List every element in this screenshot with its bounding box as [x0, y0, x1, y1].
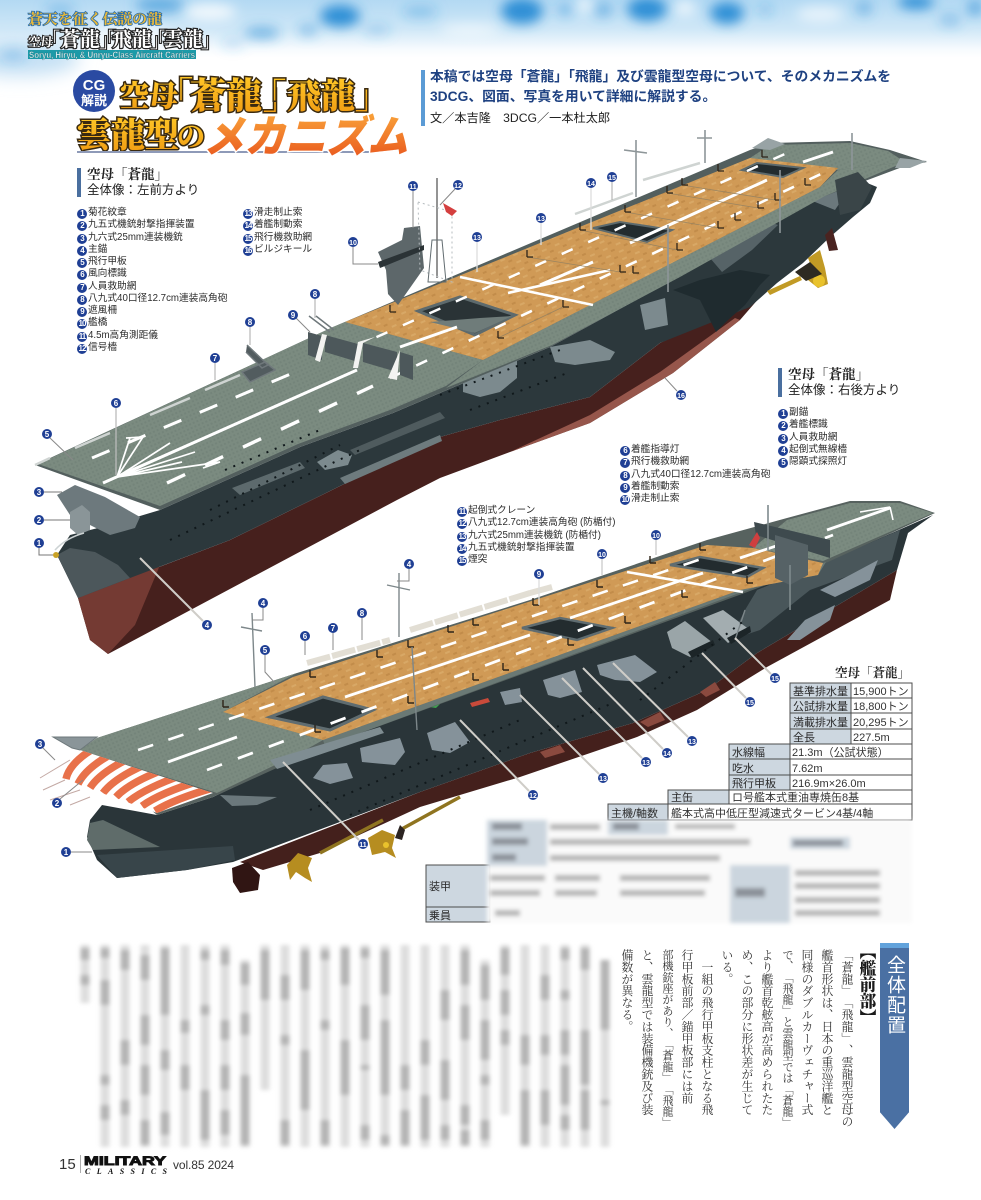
callout 8 (ship 2): 8	[360, 609, 365, 618]
callout 9 (ship 1)	[288, 310, 310, 332]
legend: ship 1 column 2: 滑走制止索	[254, 207, 302, 218]
main title: 雲龍型	[77, 116, 179, 155]
ship 1 stern hull	[835, 172, 872, 215]
legend: ship 2 items 11-15: 14	[459, 544, 465, 553]
callout 13 (ship 1): 13	[473, 235, 481, 242]
callout 11 (ship 1): 11	[409, 184, 417, 191]
callout 2 (ship 1): 2	[37, 516, 42, 525]
legend: ship 2 items 1-5: 4	[781, 446, 785, 455]
legend: ship 1 column 2: 飛行機救助網	[254, 232, 312, 242]
series logo	[28, 11, 221, 60]
specification table	[426, 665, 912, 923]
legend: ship 2 items 6-10: 9	[623, 483, 627, 492]
legend: ship 1 column 1: 九六式25mm連装機銃	[88, 232, 183, 242]
series logo: 」	[150, 30, 170, 52]
legend: ship 1 column 2: 14	[245, 221, 251, 230]
series logo: Soryu, Hiryu, & Unryu-Class Aircraft Carriers	[29, 50, 195, 60]
callout 2 (ship 2): 2	[55, 799, 60, 808]
ship 2 stripes on stern round-down	[62, 750, 213, 813]
main title: 空母	[120, 80, 178, 113]
ship 2 funnels	[667, 610, 751, 658]
CG解説 badge	[73, 70, 115, 112]
callout 3 (ship 1)	[34, 487, 62, 497]
callout 8 (ship 2)	[357, 608, 367, 640]
ship 1 wind screens	[308, 332, 413, 380]
panel heading: left front view	[77, 168, 199, 197]
legend: ship 2 items 6-10: 6	[623, 446, 627, 455]
legend: ship 1 column 1: 1	[80, 209, 84, 218]
legend: ship 1 column 1: 6	[80, 270, 84, 279]
legend: ship 2 items 1-5: 副錨	[789, 407, 808, 418]
callout 12 (ship 1): 12	[454, 183, 462, 190]
callout 15 (ship 2)	[702, 653, 755, 707]
panel heading: right rear view: 全体像：右後方より	[788, 382, 900, 396]
main title	[77, 76, 418, 162]
legend: ship 1 column 1: 8	[80, 295, 84, 304]
callout 4 (ship 1): 4	[205, 621, 210, 630]
legend: ship 1 column 1: 4	[80, 246, 84, 255]
ship 2 stern netting	[40, 760, 90, 805]
callout 4 (ship 1)	[140, 558, 212, 630]
footer logo: MILITARY	[84, 1154, 166, 1168]
callout 6 (ship 1): 6	[114, 399, 119, 408]
ship 2 elevators	[270, 697, 373, 730]
table values: 15,900トン	[853, 686, 909, 698]
table values: 20,295トン	[853, 717, 909, 729]
legend: ship 2 items 11-15: 15	[459, 556, 465, 565]
callout 10 second (ship 2)	[651, 530, 661, 555]
table title: 空母「蒼龍」	[835, 665, 910, 680]
issue info: vol.85 2024	[173, 1158, 234, 1172]
ship 2 red lower hull	[240, 570, 897, 870]
legend: ship 1 column 2: ビルジキール	[254, 244, 312, 255]
CG解説 badge: CG	[83, 77, 105, 94]
callout 10 second (ship 2): 10	[652, 533, 660, 540]
series logo: 空母	[28, 34, 53, 49]
callout 3 (ship 1): 3	[37, 488, 42, 497]
series logo: 」	[99, 30, 119, 52]
callout 1 (ship 2): 1	[64, 848, 69, 857]
ship 2 stern green deck	[80, 673, 323, 793]
panel heading: right rear view: 空母「蒼龍」	[788, 367, 869, 382]
callout 8 (ship 1): 8	[248, 318, 253, 327]
armour and crew rows	[426, 865, 490, 922]
legend: ship 1 column 1: 遮風柵	[88, 305, 117, 316]
callout 14 (ship 2)	[583, 668, 672, 758]
callout 11 (ship 2)	[283, 762, 368, 849]
legend: ship 2 items 6-10	[620, 444, 770, 505]
series logo: 蒼天を征く伝説の龍	[28, 11, 162, 28]
callout 14 (ship 1)	[586, 178, 596, 230]
ship 1 bow grey	[57, 548, 130, 598]
ship 2 red patches	[540, 682, 720, 758]
ship 2 sponsons	[313, 560, 878, 784]
legend: ship 1 column 1	[77, 206, 228, 354]
callout 5 (ship 2)	[260, 645, 275, 683]
ship 1 forecastle rail	[55, 533, 84, 550]
series logo: 」	[201, 30, 221, 52]
legend: ship 2 items 1-5	[778, 406, 847, 468]
ship 1 propellers and shaft	[767, 250, 828, 295]
panel heading: right rear view	[778, 368, 900, 397]
section banner: 全体配置	[884, 955, 905, 1035]
intro accent bar	[421, 70, 425, 126]
callout 13 second (ship 2): 13	[642, 760, 650, 767]
legend: ship 1 column 2: 13	[245, 209, 251, 218]
callout 10 (ship 2)	[597, 549, 607, 575]
legend: ship 1 column 1: 主錨	[88, 244, 107, 255]
table values	[671, 686, 909, 820]
series logo: 飛龍	[112, 28, 152, 51]
legend: ship 2 items 1-5: 人員救助網	[789, 432, 837, 442]
callout 8 second (ship 1)	[310, 289, 320, 318]
legend: ship 2 items 11-15: 煙突	[468, 554, 487, 565]
legend: ship 1 column 1: 3	[80, 234, 84, 242]
callout 13 third (ship 2)	[613, 663, 697, 746]
ship 2 lower stern highlight	[97, 846, 235, 878]
main title: メカニズム	[201, 113, 418, 162]
ship 2 boat deck green equipment	[408, 700, 440, 708]
series logo: 「	[41, 29, 61, 52]
legend: ship 1 column 1: 信号檣	[88, 342, 117, 353]
table labels: 水線幅	[732, 746, 765, 759]
legend: ship 2 items 11-15: 九五式機銃射撃指揮装置	[468, 542, 575, 553]
series logo: 「	[96, 29, 116, 52]
ship 2 deck side strip	[323, 562, 826, 746]
ship 1 masts	[624, 130, 852, 292]
legend: ship 1 column 1: 八九式40口径12.7cm連装高角砲	[88, 293, 227, 304]
callout 1 (ship 2)	[61, 847, 92, 857]
legend: ship 1 column 1: 風向標識	[88, 268, 127, 279]
ship 1 portholes	[170, 350, 570, 540]
ship 2 rudder	[232, 862, 260, 893]
ship 1 elevators	[418, 297, 515, 335]
series logo: 雲龍	[163, 27, 203, 51]
callout 4 mast forward (ship 2): 4	[407, 560, 412, 569]
table labels: 満載排水量	[793, 715, 848, 729]
series logo: 蒼龍	[60, 28, 100, 51]
ship 2 propellers	[287, 825, 405, 882]
blurred table section	[487, 820, 912, 923]
callout 3 (ship 2): 3	[38, 740, 43, 749]
table labels: 公試排水量	[793, 699, 848, 713]
footer logo	[80, 1154, 168, 1176]
table values: 7.62m	[792, 763, 823, 775]
ship 1 deck edge	[35, 141, 927, 510]
ship 2 port nets	[307, 587, 552, 663]
legend: ship 1 column 2: 着艦制動索	[254, 219, 302, 230]
callout 9 (ship 1): 9	[291, 311, 296, 320]
ship 1 chrysanthemum crest	[53, 552, 59, 558]
legend: ship 1 column 2	[243, 206, 312, 256]
legend: ship 2 items 11-15: 12	[459, 519, 465, 528]
callout 9 (ship 2): 9	[537, 570, 542, 579]
callout 11 (ship 2): 11	[359, 842, 367, 849]
callout 10 (ship 2): 10	[598, 552, 606, 559]
callout 13 (ship 2)	[520, 695, 608, 783]
callout 15 second (ship 2): 15	[771, 676, 779, 683]
legend: ship 2 items 6-10: 着艦制動索	[631, 481, 679, 492]
legend: ship 2 items 11-15: 九六式25mm連装機銃 (防楯付)	[468, 530, 601, 540]
legend: ship 1 column 2: 15	[245, 234, 251, 242]
intro text: 文／本吉隆 3DCG／一本杜太郎	[430, 111, 610, 125]
callout 1 (ship 1): 1	[37, 539, 42, 548]
legend: ship 1 column 1: 4.5m高角測距儀	[88, 330, 158, 340]
ship 2 red equipment	[470, 698, 490, 707]
table rows	[608, 683, 912, 820]
ship 1 dark hull fins	[673, 270, 770, 332]
legend: ship 1 column 1: 7	[80, 282, 84, 292]
legend: ship 1 column 1: 2	[80, 221, 84, 230]
ship 2 portholes	[310, 620, 745, 815]
callout 4 mast aft (ship 2)	[252, 598, 268, 620]
callout 12 (ship 1)	[440, 180, 463, 205]
table labels: 飛行甲板	[732, 776, 776, 790]
main title: 」	[263, 76, 299, 116]
callout 10 (ship 1): 10	[349, 240, 357, 247]
callout 5 (ship 2): 5	[263, 646, 268, 655]
section subheading: 【艦前部】	[857, 943, 876, 1026]
callout 6 (ship 2): 6	[303, 632, 308, 641]
ship 1 arresting posts	[390, 150, 811, 338]
ship 1 rudder	[825, 228, 838, 251]
table values: 227.5m	[853, 732, 890, 744]
ship 2 shafts	[320, 797, 460, 853]
callout 7 (ship 1)	[210, 353, 220, 380]
main title: 「	[252, 78, 286, 116]
callout 5 (ship 1): 5	[45, 430, 50, 439]
intro text: 本稿では空母「蒼龍」「飛龍」及び雲龍型空母について、そのメカニズムを	[430, 69, 891, 84]
section banner	[880, 943, 909, 1129]
table values: ロ号艦本式重油専焼缶8基	[732, 790, 859, 804]
table labels: 主機/軸数	[611, 806, 658, 820]
legend: ship 2 items 11-15: 11	[459, 507, 465, 516]
legend: ship 2 items 6-10: 滑走制止索	[631, 493, 679, 504]
ship 2 island	[749, 505, 830, 610]
ship 1 deck markings	[92, 152, 833, 483]
armour and crew rows: 乗員	[429, 909, 451, 922]
callout 15 (ship 1): 15	[608, 175, 616, 182]
legend: ship 2 items 11-15	[457, 504, 615, 566]
legend: ship 1 column 1: 9	[80, 307, 84, 316]
callout 7 (ship 1): 7	[213, 354, 218, 363]
ship 1 bow red planks	[78, 565, 160, 654]
series logo: 「	[147, 29, 167, 52]
callout 6 (ship 2)	[300, 631, 310, 655]
ship 1 lower hull (red)	[78, 297, 760, 654]
legend: ship 1 column 1: 11	[79, 332, 85, 340]
legend: ship 2 items 1-5: 隠顕式探照灯	[789, 456, 847, 467]
callout 14 (ship 2): 14	[663, 751, 671, 758]
table labels: 吃水	[732, 762, 754, 775]
CG解説 badge: 解説	[81, 93, 107, 108]
legend: ship 2 items 6-10: 飛行機救助網	[631, 456, 689, 467]
legend: ship 2 items 6-10: 7	[623, 458, 627, 467]
callout 14 (ship 1): 14	[587, 181, 595, 188]
legend: ship 2 items 11-15: 八九式12.7cm連装高角砲 (防楯付)	[468, 517, 615, 528]
ship 1 arresting wires	[498, 185, 775, 338]
ship 1 dark hull	[57, 172, 877, 598]
callout 11 (ship 1)	[408, 181, 418, 228]
ship 1 stern lattice	[752, 138, 927, 168]
main title: 」	[355, 79, 389, 116]
callout 16 (ship 1): 16	[677, 393, 685, 400]
callout 7 (ship 2): 7	[331, 624, 336, 633]
ship 1 bow gun platform	[57, 485, 140, 535]
armour and crew rows: 装甲	[429, 880, 451, 893]
ship 2 stern support	[220, 795, 277, 806]
callout 2 (ship 2)	[52, 780, 83, 808]
ship 1 green deck forward	[38, 322, 483, 506]
legend: ship 2 items 6-10: 八九式40口径12.7cm連装高角砲	[631, 468, 770, 480]
callout 4 mast forward (ship 2)	[397, 559, 414, 581]
ship 2 dark hull	[87, 515, 933, 878]
panel heading: left front view: 全体像：左前方より	[87, 182, 199, 196]
ship 2 forward green deck	[753, 503, 933, 561]
legend: ship 2 items 1-5: 1	[781, 409, 785, 418]
ship 2 deck markings	[138, 507, 893, 770]
ship 1 green deck aft	[750, 143, 905, 170]
SHIP 2: Soryu from starboard quarter	[40, 501, 935, 893]
callout 15 (ship 2): 15	[746, 700, 754, 707]
panel heading: left front view: 空母「蒼龍」	[87, 167, 168, 182]
ship 2 bow upper side	[730, 530, 900, 640]
table labels	[611, 684, 848, 820]
callout 13 third (ship 2): 13	[688, 739, 696, 746]
sky header background	[0, 0, 981, 76]
callout 8 (ship 1)	[245, 317, 255, 345]
ship 2 deck edge	[80, 501, 935, 815]
main title: 飛龍	[287, 78, 355, 116]
callout 7 (ship 2)	[328, 623, 338, 650]
callout 9 (ship 2)	[534, 569, 544, 605]
body text: 「蒼龍」「飛龍」、雲龍型空母の 艦首形状は、日本の重巡洋艦と 同様のダブルカーヴェチャー式 で、「飛龍」と雲龍型では「蒼龍」 より艦首乾舷高が高められたた め、この部分に形状差が生じて いる。 一組の飛行甲板支柱となる飛 行甲板前部／錨甲板部には前 部機銃座があり、「蒼龍」「飛龍」 と、雲龍型では装備機銃及び装 備数が異なる。	[620, 949, 854, 1128]
callout 12 (ship 2)	[460, 720, 538, 800]
ship 2 stern lattice	[53, 737, 97, 750]
callout 12 (ship 2): 12	[529, 793, 537, 800]
main title: の	[177, 122, 205, 153]
callout 6 (ship 1)	[111, 398, 121, 475]
ship 2 quarterdeck	[87, 820, 160, 850]
legend: ship 2 items 1-5: 着艦標識	[789, 419, 828, 430]
ship 2 masts	[241, 573, 745, 730]
ship 1 orange deck	[345, 158, 838, 360]
ship 1 sponsons	[232, 175, 855, 495]
table labels: 主缶	[671, 790, 693, 804]
blurred body text columns	[85, 945, 605, 1147]
legend: ship 1 column 1: 10	[79, 319, 85, 328]
table values: 21.3m（公試状態）	[792, 745, 889, 759]
ship 1 bow director	[70, 505, 90, 535]
callout 3 (ship 2)	[35, 739, 55, 760]
table labels: 基準排水量	[793, 684, 848, 698]
callout 10 (ship 1)	[348, 237, 378, 264]
callout 4 mast aft (ship 2): 4	[261, 599, 266, 608]
legend: ship 1 column 1: 艦橋	[88, 317, 107, 328]
page number: 15	[59, 1156, 76, 1173]
ship 1 bilge highlight	[510, 318, 740, 452]
ship 1 green deck side strip	[446, 162, 905, 388]
ship 1 deck guns	[242, 316, 334, 382]
legend: ship 1 column 1: 5	[80, 258, 84, 267]
SHIP 1: Soryu from port bow	[35, 130, 927, 654]
callout 2 (ship 1)	[34, 515, 70, 525]
table values: 18,800トン	[853, 701, 909, 713]
ship 2 arresting posts	[223, 543, 753, 732]
legend: ship 1 column 1: 飛行甲板	[88, 256, 127, 267]
legend: ship 1 column 1: 九五式機銃射撃指揮装置	[88, 219, 195, 230]
legend: ship 2 items 6-10: 着艦指導灯	[631, 444, 679, 455]
table values: 艦本式高中低圧型減速式タービン4基/4軸	[671, 806, 873, 820]
legend: ship 2 items 11-15: 起倒式クレーン	[468, 505, 535, 516]
ship 1 island	[378, 178, 457, 305]
footer logo: CLASSICS	[85, 1167, 168, 1176]
legend: ship 1 column 1: 12	[79, 344, 85, 353]
table values: 216.9m×26.0m	[792, 778, 866, 790]
callout 13 second (ship 1): 13	[537, 216, 545, 223]
main title: 蒼龍	[190, 76, 262, 116]
callout 13 (ship 2): 13	[599, 776, 607, 783]
ship 2 orange deck	[223, 545, 823, 740]
legend: ship 2 items 1-5: 5	[781, 458, 785, 467]
callout 13 second (ship 2)	[562, 678, 651, 767]
intro text	[430, 69, 891, 125]
legend: ship 2 items 1-5: 3	[781, 434, 785, 442]
table labels: 全長	[793, 730, 815, 744]
callout 15 second (ship 2)	[735, 638, 780, 683]
callout 8 second (ship 1): 8	[313, 290, 318, 299]
intro text: 3DCG、図面、写真を用いて詳細に解説する。	[430, 89, 716, 104]
legend: ship 1 column 2: 16	[245, 246, 251, 255]
callout 13 second (ship 1)	[536, 213, 546, 245]
legend: ship 1 column 1: 人員救助網	[88, 280, 136, 292]
callout 13 (ship 1)	[472, 232, 482, 272]
legend: ship 2 items 1-5: 起倒式無線檣	[789, 444, 847, 455]
callout 5 (ship 1)	[42, 429, 73, 460]
legend: ship 2 items 1-5: 2	[781, 421, 785, 430]
legend: ship 2 items 6-10: 8	[623, 470, 627, 480]
legend: ship 2 items 11-15: 13	[459, 532, 465, 540]
legend: ship 1 column 1: 菊花紋章	[88, 207, 127, 218]
callout 15 (ship 1)	[607, 172, 617, 200]
main title: 「	[157, 76, 193, 116]
ship 1 port safety nets	[35, 163, 700, 465]
callout 1 (ship 1)	[34, 538, 53, 555]
legend: ship 2 items 6-10: 10	[622, 495, 628, 504]
callout 16 (ship 1)	[665, 378, 686, 400]
ship 2 side plate	[270, 727, 384, 769]
